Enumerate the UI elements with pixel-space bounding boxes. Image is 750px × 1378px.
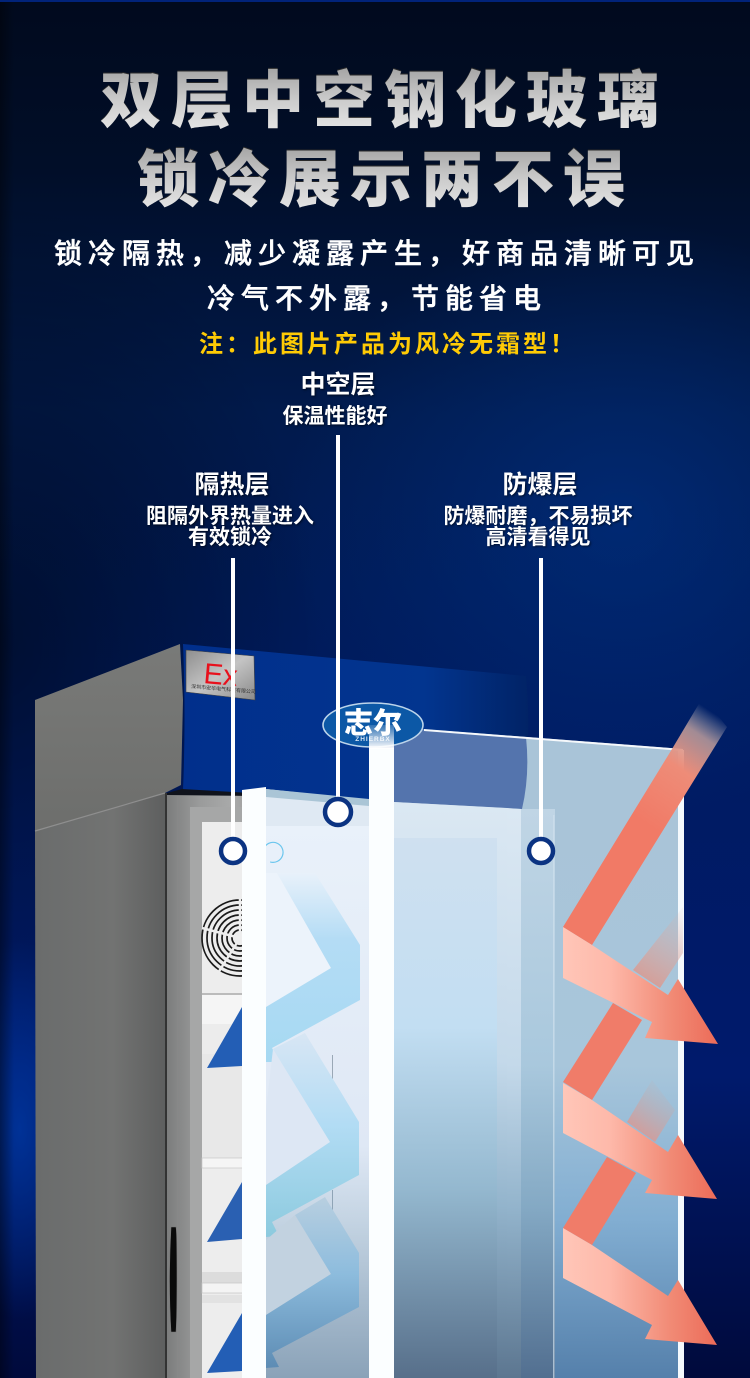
label: insulation layer: 有效锁冷 (188, 526, 272, 549)
icon: touch ring (264, 840, 286, 864)
faded back bands (627, 907, 683, 1142)
subtitle text: 冷气不外露，节能省电 (207, 283, 547, 314)
icon: faint fan behind glass (266, 908, 278, 958)
glass top band over header (266, 727, 683, 835)
label: explosion-proof layer: 防爆层 (502, 471, 578, 499)
title: 锁冷展示两不误 (137, 146, 634, 215)
callout pointer: insulation layer (221, 558, 245, 863)
fridge interior (202, 822, 268, 1378)
subtitle text: 锁冷隔热，减少凝露产生，好商品清晰可见 (54, 238, 700, 269)
icon: fan (202, 898, 278, 976)
fridge door frame (167, 795, 260, 1378)
logo (323, 703, 423, 747)
logo: ZHIERBX (355, 736, 391, 743)
logo: 志尔 (344, 707, 402, 740)
label: insulation layer (146, 471, 314, 549)
heat arrow 3 (563, 1157, 717, 1345)
note in yellow: 注：此图片产品为风冷无霜型！ (199, 331, 577, 358)
callout pointer: explosion-proof layer (529, 558, 553, 863)
label: insulation layer: 隔热层 (194, 471, 270, 499)
white glass edge strips (242, 725, 394, 1378)
explosion-proof plate: Ex (202, 658, 239, 693)
label: explosion-proof layer: 防爆耐磨，不易损坏 (444, 505, 632, 528)
blue cold-air arrows (207, 873, 360, 1373)
label: insulation layer: 阻隔外界热量进入 (146, 505, 314, 528)
fridge side panel (35, 644, 183, 1378)
heat arrow 2 (563, 1003, 717, 1199)
heat arrows in red (563, 697, 727, 1345)
label: hollow layer (282, 371, 388, 428)
label: hollow layer: 中空层 (300, 371, 376, 399)
cold arrow 1 (207, 873, 360, 1068)
label: explosion-proof layer (444, 471, 632, 549)
label: explosion-proof layer: 高清看得见 (486, 525, 590, 549)
glass panes (266, 729, 684, 1378)
cold arrow 2 (207, 1033, 359, 1242)
heat arrow 1 (563, 697, 727, 1044)
door handle (170, 1227, 177, 1332)
fridge header in blue (167, 644, 528, 810)
cold arrow 3 (207, 1197, 359, 1373)
title (100, 67, 668, 215)
callout pointer: hollow layer (325, 435, 351, 825)
explosion-proof plate: 深圳市宏华电气科技有限公司 (191, 683, 256, 696)
explosion-proof plate (186, 650, 256, 700)
subtitle text (54, 238, 700, 314)
label: hollow layer: 保温性能好 (282, 405, 388, 428)
title: 双层中空钢化玻璃 (100, 67, 668, 136)
